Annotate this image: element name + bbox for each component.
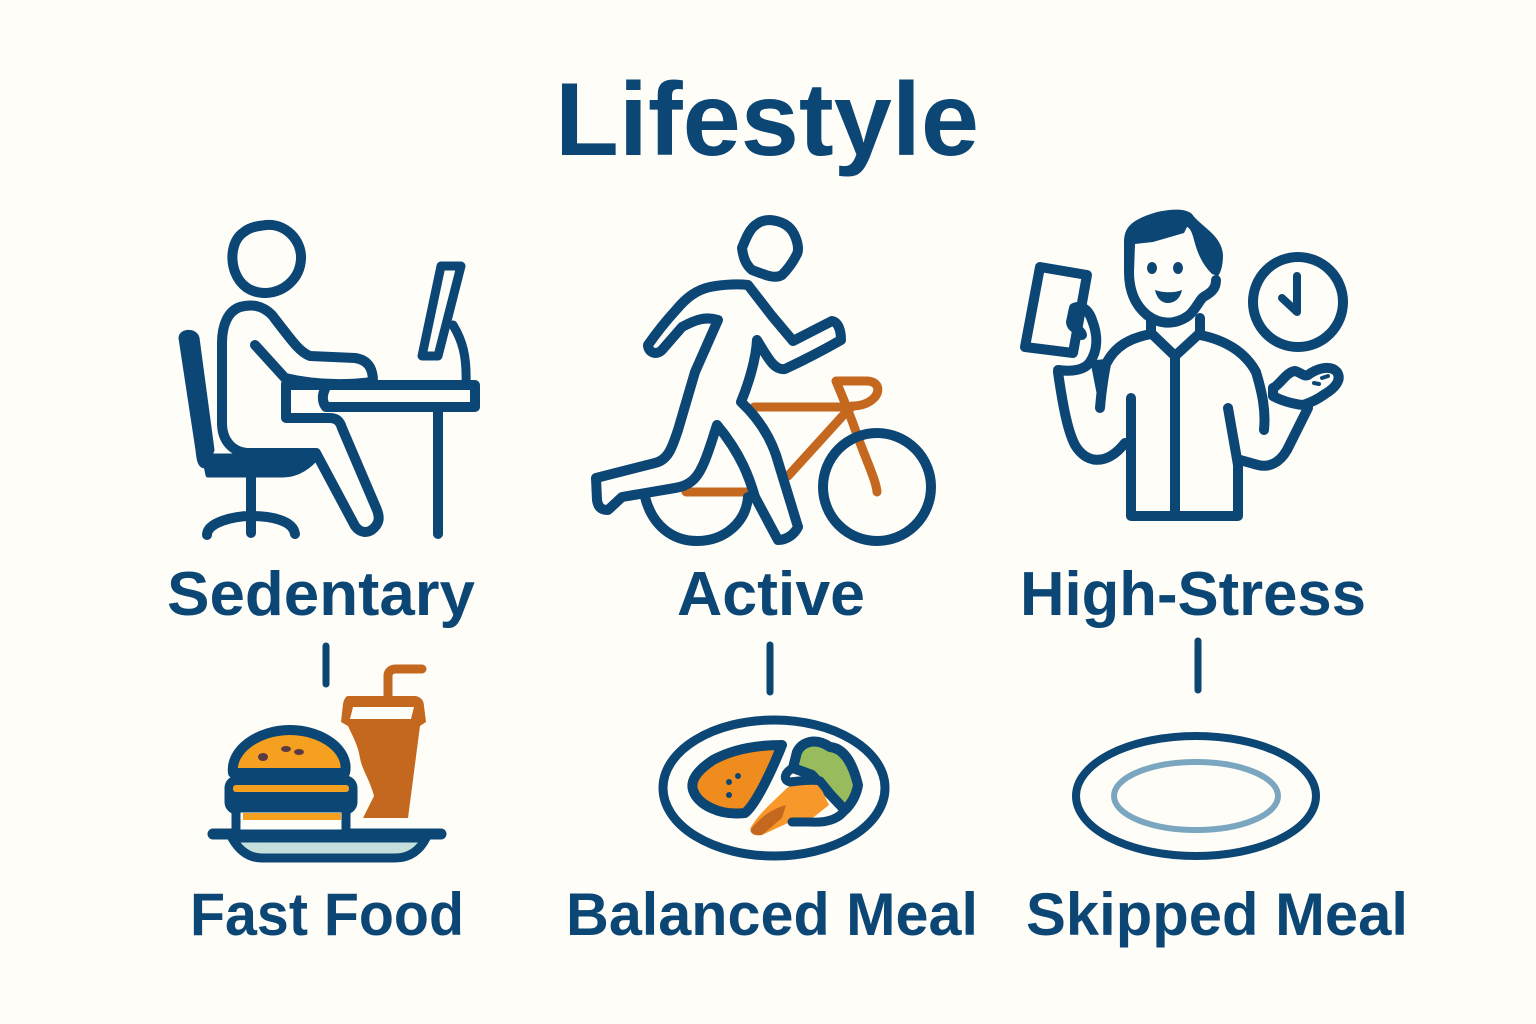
icon: fast food burger and drink (213, 669, 441, 858)
carrot (750, 782, 829, 835)
icon: empty plate (1076, 736, 1316, 856)
title: Lifestyle (555, 62, 979, 178)
plate (232, 838, 426, 858)
bun bottom (236, 808, 346, 834)
label: Sedentary: Sedentary (167, 560, 476, 629)
hair (1124, 210, 1223, 276)
label: Balanced Meal: Balanced Meal (566, 881, 978, 948)
left arm (1058, 372, 1125, 460)
icon: balanced meal plate (663, 720, 885, 856)
face (1129, 243, 1216, 323)
hand (1273, 368, 1339, 405)
connector: active to balanced meal (766, 645, 774, 692)
drink (388, 669, 422, 698)
label: Fast Food: Fast Food (190, 881, 464, 948)
chicken (692, 745, 782, 813)
icon: runner with bicycle (596, 220, 931, 541)
label: High-Stress: High-Stress (1020, 560, 1366, 629)
tablet (1025, 267, 1087, 353)
bicycle frame (686, 381, 878, 492)
connector: sedentary to fast food (322, 646, 330, 684)
broccoli (793, 742, 858, 810)
right arm (1240, 408, 1308, 466)
sesame seeds (258, 753, 268, 761)
icon: stressed man with phone and clock (1025, 210, 1343, 516)
filling (229, 780, 353, 810)
shirt (1151, 318, 1200, 356)
clock (1253, 257, 1343, 347)
connector: high-stress to skipped meal (1194, 641, 1202, 690)
bun top (233, 730, 346, 773)
runner (596, 220, 841, 540)
wheels (645, 433, 931, 541)
icon: sedentary person at desk (181, 225, 475, 535)
label: Skipped Meal: Skipped Meal (1026, 881, 1408, 948)
label: Active: Active (677, 560, 865, 629)
